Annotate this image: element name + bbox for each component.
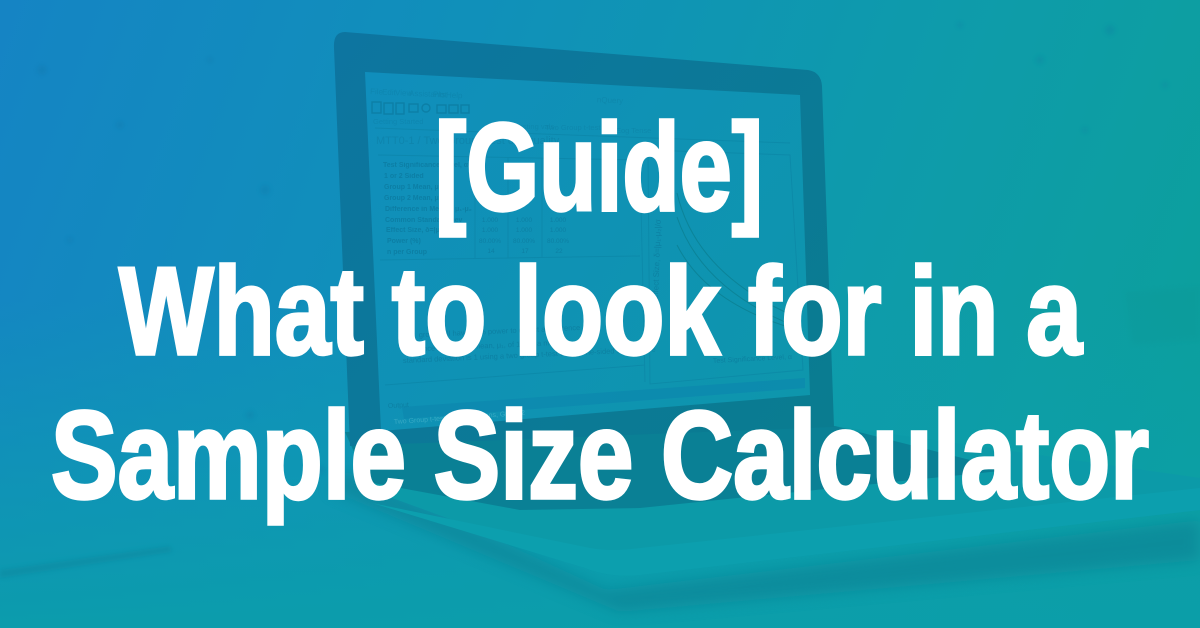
- tabs: Getting Started: [373, 117, 423, 126]
- menu bar: Plot: [433, 90, 448, 100]
- menu bar: Edit: [382, 88, 397, 97]
- parameter table: Effect Size, δ=|μ₁-μ₂|/σ: [386, 227, 461, 234]
- output bar: [402, 378, 805, 419]
- tabs: Testing vals: [515, 122, 554, 131]
- parameter table: 1 or 2 Sided: [384, 173, 424, 180]
- plot curves: [677, 193, 785, 326]
- software window: [370, 85, 805, 426]
- parameter values: 1.000: [550, 227, 567, 234]
- parameter values: 80.00%: [479, 238, 501, 245]
- screen bezel: [334, 32, 834, 446]
- tabs: Eog Tense: [616, 126, 651, 135]
- parameter table: Power (%): [387, 238, 421, 245]
- parameter table: Test Significance Level, α: [383, 162, 469, 169]
- parameter values: [479, 217, 569, 255]
- parameter values: 80.00%: [547, 238, 569, 245]
- plot axis label: Effect Size, δ=|μ₁-μ₂|/σ: [651, 219, 663, 300]
- table title: MTT0-1 / Two Group t-test of Equality: [376, 135, 560, 147]
- parameter values: 22: [555, 248, 563, 255]
- plot x-axis label: Test Significance Level, α: [713, 354, 792, 365]
- parameter table: Difference in Means, μ₁-μ₂: [385, 206, 472, 213]
- output label: Output: [388, 402, 409, 410]
- parameter table: n per Group: [387, 249, 427, 256]
- menu bar: Assistants: [409, 89, 446, 99]
- description text: [402, 320, 656, 365]
- title line 1: [Guide]: [435, 99, 763, 237]
- menu bar: File: [370, 87, 384, 97]
- window panels: [375, 128, 803, 385]
- menu bar: nQuery: [597, 95, 623, 105]
- parameter values: 1.000: [550, 217, 567, 224]
- menu bar: View: [395, 88, 413, 98]
- background desk objects: [0, 286, 1200, 578]
- parameter values: 1.000: [516, 227, 533, 234]
- background bokeh dots: [37, 22, 1168, 475]
- parameter table: Group 2 Mean, μ₂: [384, 195, 442, 202]
- keyboard: [345, 426, 1010, 510]
- menu bar: Help: [446, 90, 463, 100]
- description text: standard deviation is 1 using a two group t-test with a one-sided significance: [403, 345, 656, 365]
- laptop: [330, 32, 1200, 612]
- tabs: [373, 117, 651, 135]
- description text: difference between a mean, μ₁, of 1 and a mean, μ₂, of 2: [402, 336, 590, 354]
- menu bar: [370, 85, 623, 107]
- parameter values: 80.00%: [513, 238, 535, 245]
- tabs: Two Group t-test of E: [545, 123, 616, 132]
- parameter table: Group 1 Mean, μ₁: [384, 184, 442, 191]
- toolbar icons: [372, 102, 469, 114]
- title: [51, 99, 1149, 525]
- parameter table: Common Standard Dev: [385, 217, 463, 224]
- description text: group will have 80% power to detect a difference: [419, 323, 580, 339]
- parameter values: 1.000: [516, 217, 533, 224]
- parameter values: 17: [521, 248, 529, 255]
- parameter values: 1.000: [482, 227, 499, 234]
- laptop base: [345, 426, 1200, 576]
- laptop shadow: [330, 470, 1200, 612]
- parameter values: 14: [487, 248, 495, 255]
- parameter table: [383, 162, 472, 256]
- screen: [365, 72, 810, 431]
- parameter values: 1.000: [482, 217, 499, 224]
- status text: Two Group t-test of Equal Means, Group 2: [394, 410, 525, 426]
